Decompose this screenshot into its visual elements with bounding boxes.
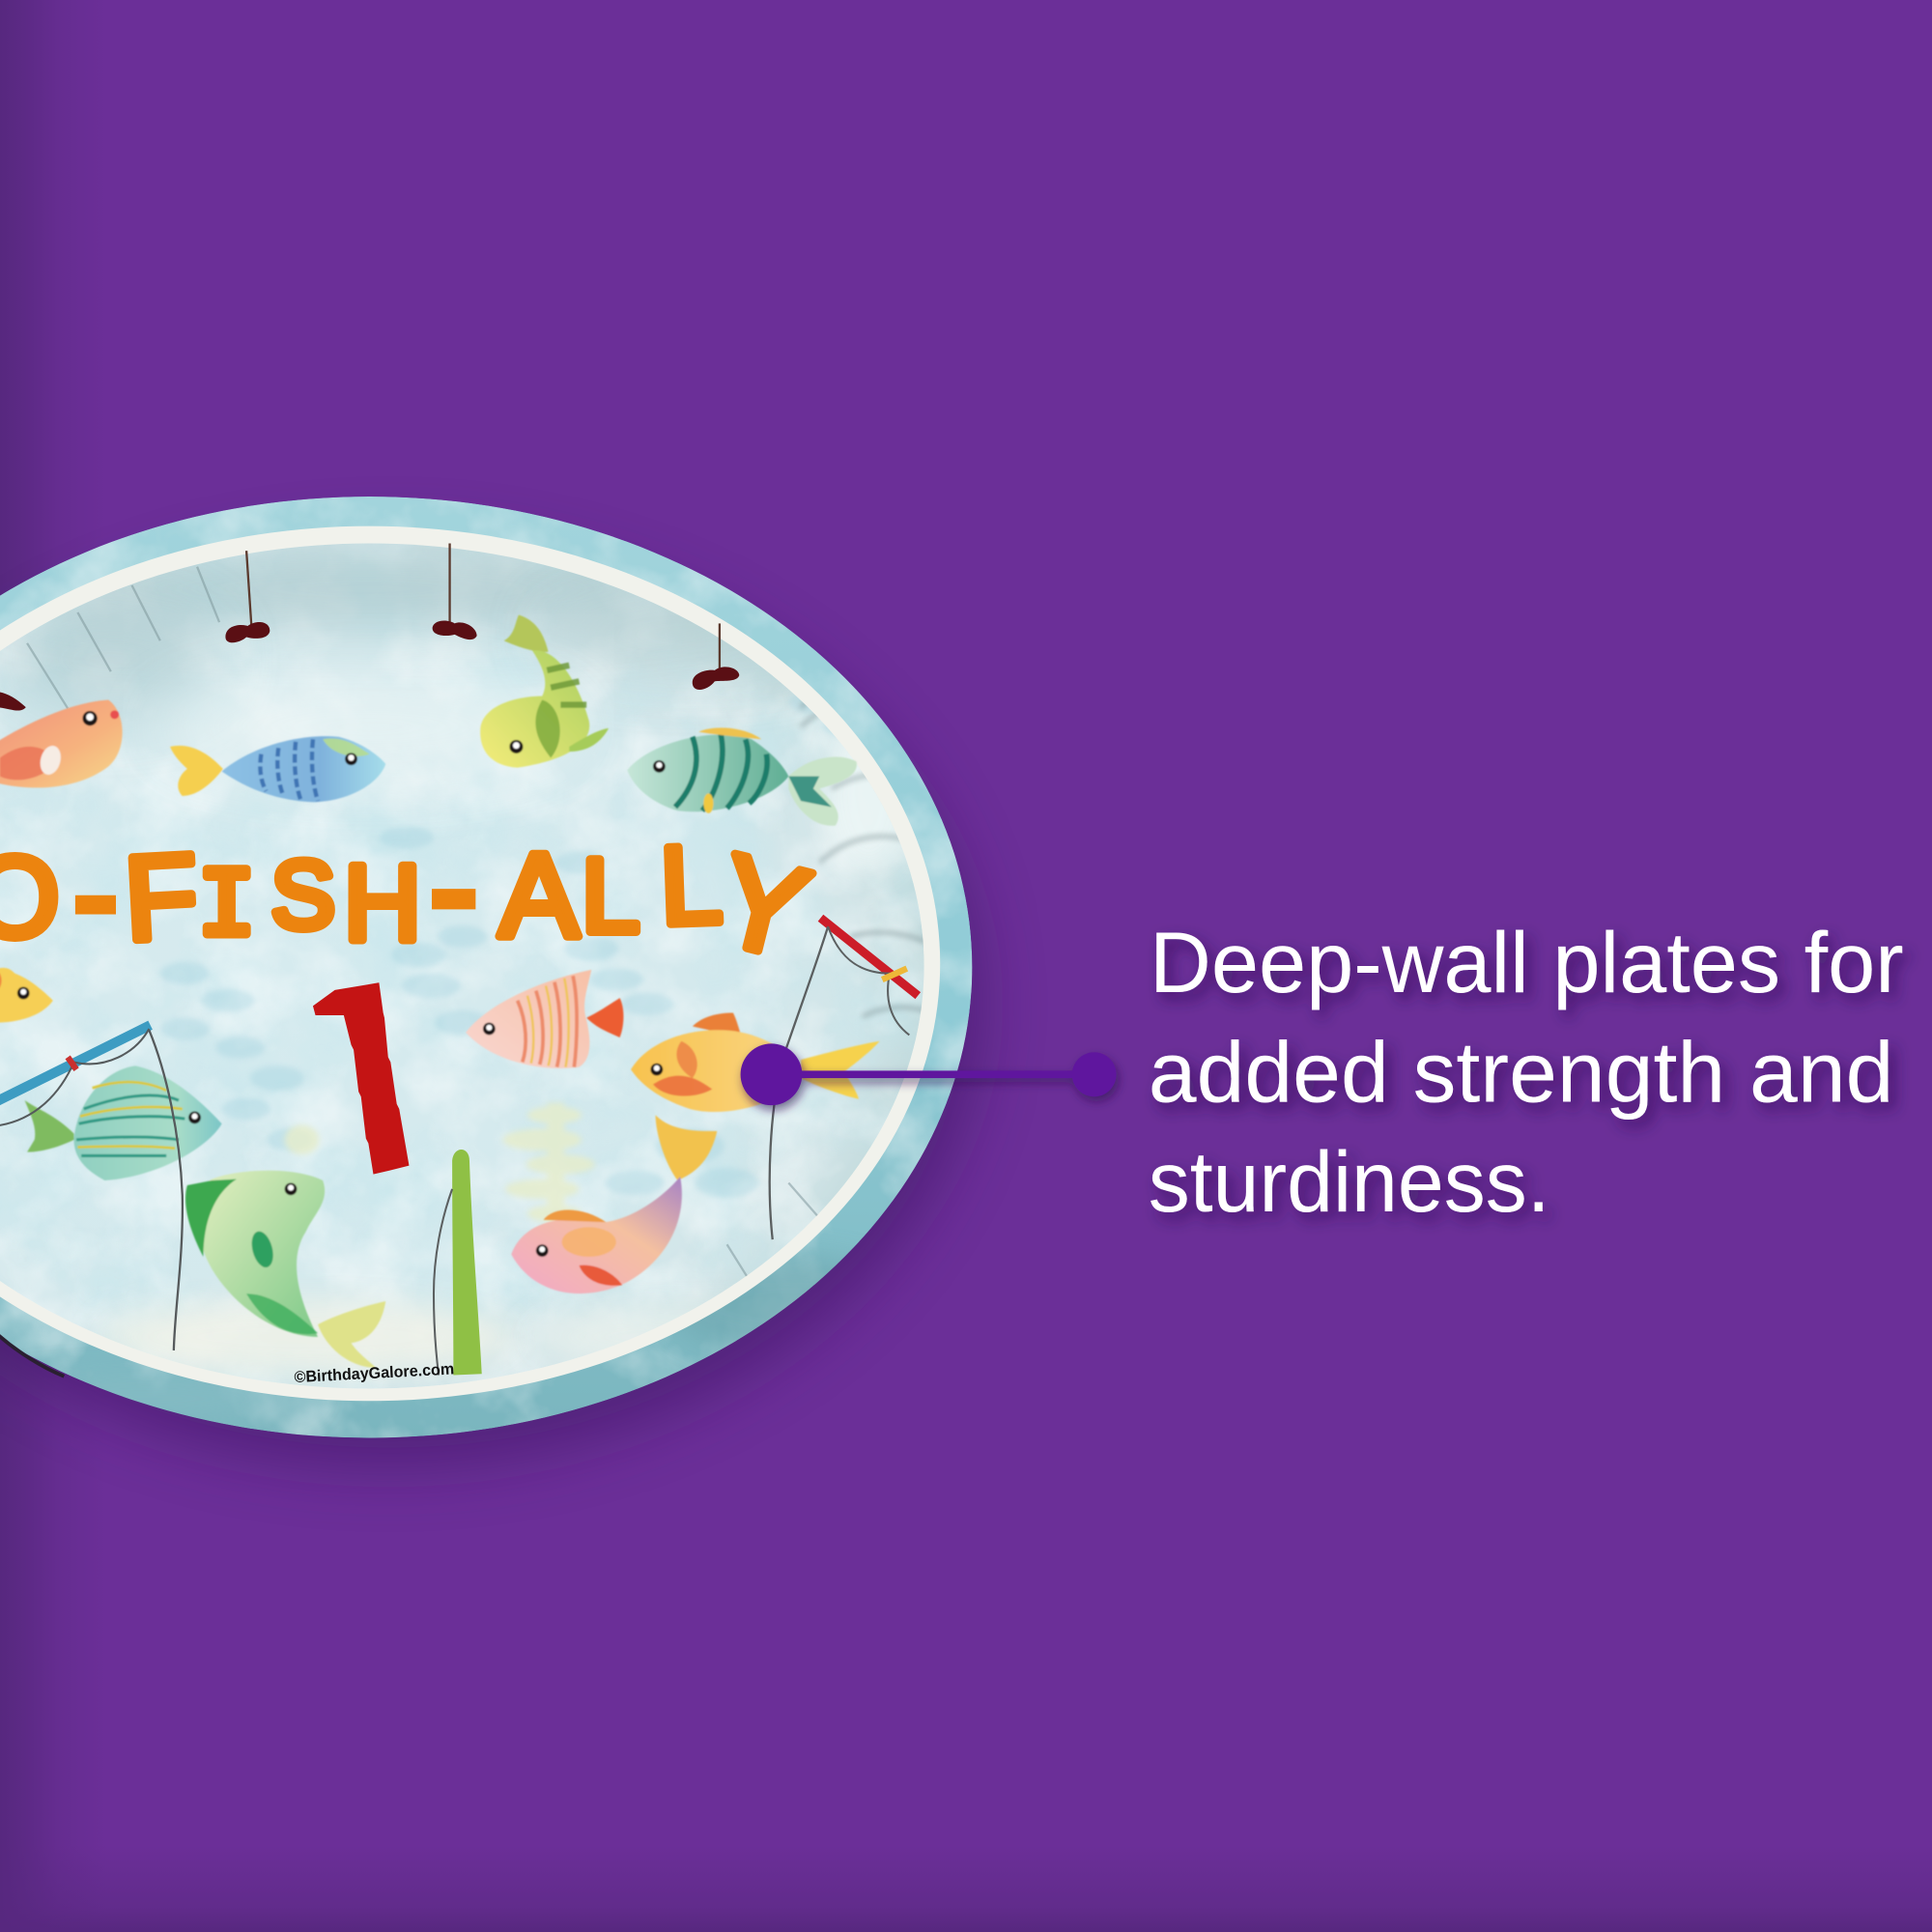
seaweed stem [452,1150,482,1375]
left fishing net [0,1025,183,1350]
callout text: Deep-wall plates for [1150,914,1904,1010]
copyright text: ©BirthdayGalore.com [294,1359,455,1386]
plate well [0,529,949,1405]
plate wall creases [27,567,832,1293]
callout connector [741,1043,1117,1105]
plate numeral 1: 1 [239,912,490,1255]
plate seaweed wash [160,692,877,1198]
fishing line and bait 2 [433,543,477,639]
fish: pink and purple [511,1115,717,1293]
fish: yellow-green curled [480,614,609,768]
fish: yellow, clipped at left [0,967,53,1023]
plate outer rim [0,487,985,1448]
fish: mint curled [185,1171,385,1368]
callout text: added strength and [1149,1023,1893,1120]
right fishing net [770,918,918,1239]
fish: golden [631,1012,880,1112]
plate pale seaweed [285,1103,595,1226]
plate [0,487,985,1448]
fish: blue striped [170,736,385,802]
fishing line and bait 4 [0,692,26,711]
fish: pink angelfish [466,970,623,1068]
fishing line and bait 3 [693,623,739,690]
plate drop shadow [0,541,983,1467]
plate wall shadows [798,701,923,1020]
callout text: sturdiness. [1149,1133,1550,1230]
fish: coral [0,699,123,787]
plate white ring [0,526,940,1401]
fishing line and bait 1 [225,551,270,642]
fish: green striped [627,727,857,826]
connector end dot [1072,1052,1117,1096]
plate dark lower-left edge [0,1334,64,1377]
callout text [1149,914,1904,1230]
connector start dot [741,1043,802,1105]
fishing line by seaweed [434,1189,452,1375]
fish: teal striped, left [25,1065,222,1180]
connector line [771,1070,1094,1078]
